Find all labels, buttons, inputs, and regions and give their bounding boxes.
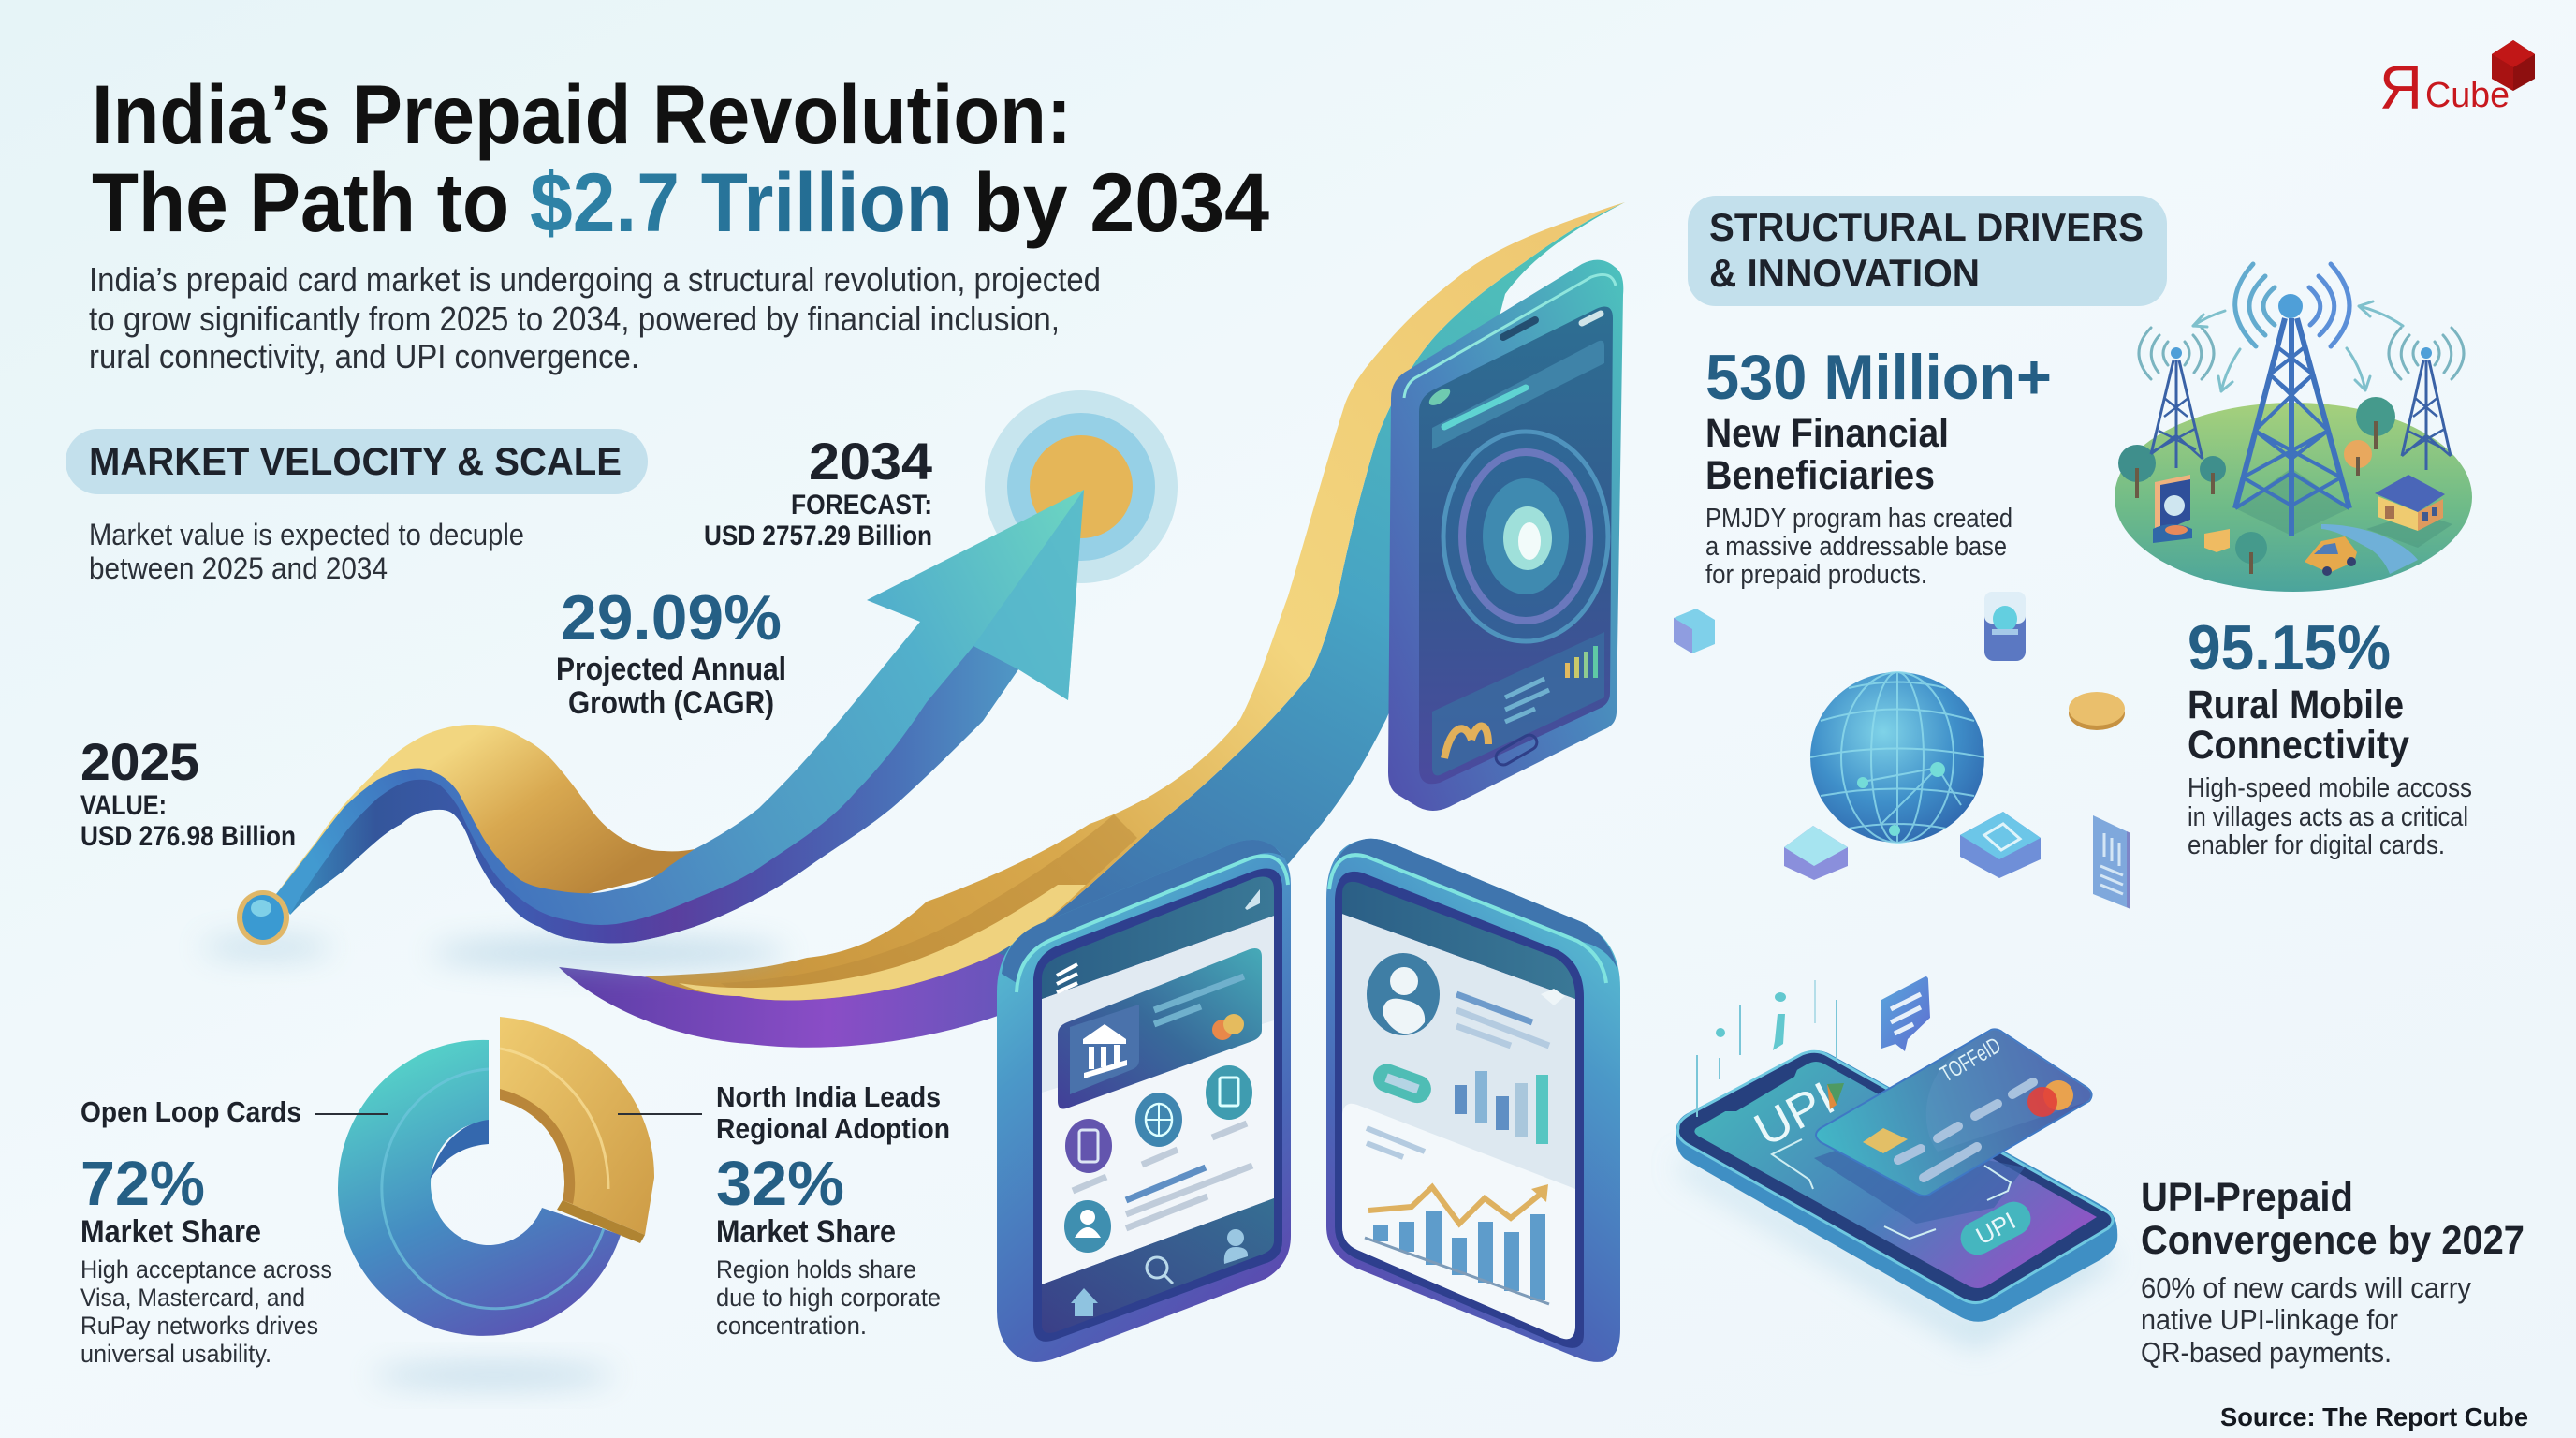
beneficiaries stat: PMJDY program has created	[1705, 504, 2012, 534]
2034 forecast label: 2034	[809, 432, 932, 491]
source line: Source: The Report Cube	[2220, 1402, 2528, 1431]
UPI phone and prepaid card illustration: UPI	[1971, 1207, 2020, 1250]
UPI convergence text	[2141, 1175, 2525, 1369]
title: $2.7 Trillion	[530, 155, 953, 249]
UPI phone and prepaid card illustration	[1676, 976, 2117, 1348]
UPI convergence text: QR-based payments.	[2141, 1336, 2392, 1369]
CAGR stat: 29.09%	[561, 582, 782, 653]
donut chart	[338, 1017, 654, 1387]
UPI phone and prepaid card illustration: UPI	[1746, 1072, 1843, 1156]
north india stat: concentration.	[716, 1312, 867, 1340]
market value note: between 2025 and 2034	[89, 551, 388, 585]
section pill: market velocity and scale: MARKET VELOCITY & SCALE	[89, 439, 622, 483]
shadow under growth ribbon	[201, 938, 786, 968]
2025 value label: 2025	[80, 732, 199, 791]
title: India’s Prepaid Revolution:	[92, 67, 1072, 161]
open loop stat: High acceptance across	[80, 1255, 332, 1284]
market value note: Market value is expected to decuple	[89, 518, 524, 551]
2034 forecast label	[704, 432, 932, 551]
section pill: structural drivers: & INNOVATION	[1709, 251, 1980, 295]
2025 value label: USD 276.98 Billion	[80, 821, 296, 852]
phone illustration: banking app	[997, 840, 1291, 1362]
open loop stat: Market Share	[80, 1214, 261, 1250]
beneficiaries stat: 530 Million+	[1705, 342, 2052, 413]
target circle	[985, 390, 1178, 583]
2025 value label: VALUE:	[80, 790, 167, 821]
large swoosh ribbon	[559, 202, 1625, 1048]
north india stat: 32%	[716, 1149, 844, 1219]
start dot	[237, 890, 289, 945]
globe network	[1810, 672, 1984, 843]
2034 forecast label: USD 2757.29 Billion	[704, 521, 932, 551]
beneficiaries stat: for prepaid products.	[1705, 560, 1927, 590]
intro paragraph	[89, 260, 1101, 375]
rural connectivity stat: enabler for digital cards.	[2188, 830, 2445, 860]
logo: Я	[2379, 52, 2422, 122]
intro paragraph: India’s prepaid card market is undergoing a structural revolution, projected	[89, 260, 1101, 299]
logo	[2379, 40, 2535, 122]
north india label and leader line	[618, 1080, 950, 1145]
floating cylinder icon	[1984, 592, 2026, 661]
rural connectivity stat: High-speed mobile accoss	[2188, 773, 2472, 803]
beneficiaries stat: a massive addressable base	[1705, 532, 2007, 562]
title: by 2034	[973, 155, 1269, 249]
section pill: market velocity and scale	[66, 429, 648, 494]
CAGR stat: Growth (CAGR)	[568, 685, 774, 721]
open loop label and leader line: Open Loop Cards	[80, 1095, 301, 1128]
north india stat	[716, 1149, 941, 1340]
north india stat: Market Share	[716, 1214, 896, 1250]
rural connectivity stat: 95.15%	[2188, 612, 2391, 683]
CAGR stat	[556, 582, 786, 721]
2034 forecast label: FORECAST:	[791, 490, 932, 521]
intro paragraph: to grow significantly from 2025 to 2034, powered by financial inclusion,	[89, 300, 1060, 338]
logo: Cube	[2425, 76, 2510, 115]
phone illustration: top right dashboard	[1388, 260, 1623, 811]
title	[92, 67, 1269, 249]
UPI phone and prepaid card illustration: TOFFeID	[1936, 1033, 2005, 1088]
section pill: structural drivers	[1688, 196, 2167, 306]
beneficiaries stat	[1705, 342, 2052, 590]
north india label and leader line: North India Leads	[716, 1080, 941, 1113]
rural connectivity stat: Connectivity	[2188, 723, 2409, 768]
rural connectivity stat: in villages acts as a critical	[2188, 802, 2468, 832]
intro paragraph: rural connectivity, and UPI convergence.	[89, 337, 639, 375]
beneficiaries stat: Beneficiaries	[1705, 453, 1935, 498]
north india stat: due to high corporate	[716, 1284, 941, 1312]
2025 value label	[80, 732, 296, 852]
CAGR stat: Projected Annual	[556, 652, 786, 687]
title: The Path to	[92, 155, 509, 249]
open loop stat	[80, 1149, 332, 1368]
beneficiaries stat: New Financial	[1705, 411, 1949, 456]
open loop stat: RuPay networks drives	[80, 1312, 318, 1340]
village illustration with towers	[2115, 264, 2472, 592]
north india stat: Region holds share	[716, 1255, 916, 1284]
floating cube icon	[1674, 609, 1715, 653]
section pill: structural drivers: STRUCTURAL DRIVERS	[1709, 205, 2144, 249]
coin icon	[2069, 692, 2125, 730]
rural connectivity stat: Rural Mobile	[2188, 682, 2404, 727]
UPI convergence text: 60% of new cards will carry	[2141, 1271, 2471, 1304]
north india label and leader line: Regional Adoption	[716, 1112, 950, 1145]
open loop stat: universal usability.	[80, 1340, 271, 1368]
growth ribbon arrow	[276, 490, 1084, 943]
market value note	[89, 518, 524, 585]
UPI convergence text: native UPI-linkage for	[2141, 1303, 2398, 1336]
UPI convergence text: Convergence by 2027	[2141, 1218, 2525, 1263]
UPI convergence text: UPI-Prepaid	[2141, 1175, 2353, 1220]
open loop stat: Visa, Mastercard, and	[80, 1284, 305, 1312]
phone illustration: analytics app	[1326, 839, 1620, 1362]
rural connectivity stat	[2188, 612, 2472, 860]
open loop stat: 72%	[80, 1149, 205, 1219]
small device cubes	[1784, 812, 2041, 880]
floating document icon	[2093, 815, 2130, 909]
